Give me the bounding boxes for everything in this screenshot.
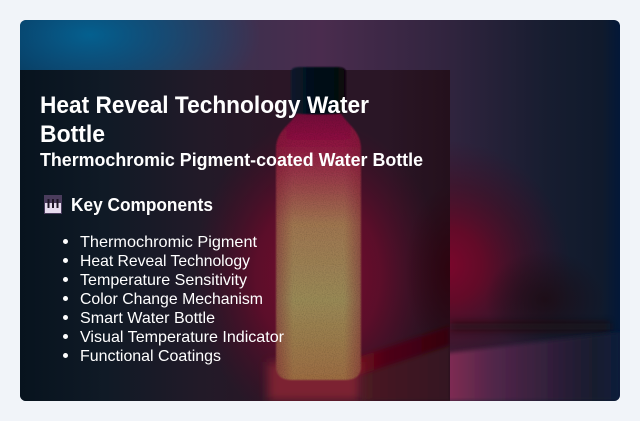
bottle reflection on floor: [268, 362, 360, 401]
title: Heat Reveal Technology Water: [40, 92, 369, 119]
component list: Color Change Mechanism: [80, 291, 263, 308]
bottle body: [276, 112, 361, 380]
text content: [40, 92, 423, 365]
bottle: [268, 67, 361, 401]
component list: Temperature Sensitivity: [80, 272, 247, 289]
component list: Functional Coatings: [80, 348, 221, 365]
component list: Visual Temperature Indicator: [80, 329, 285, 346]
bottle cap: [291, 67, 346, 114]
translucent text panel: [20, 70, 495, 401]
component list: Heat Reveal Technology: [80, 253, 250, 270]
bottle grain texture: [276, 112, 361, 380]
title: [42, 96, 369, 142]
component list: [63, 234, 285, 365]
component list: Thermochromic Pigment: [80, 234, 258, 251]
section heading: key components: Key Components: [71, 195, 213, 215]
component list: Smart Water Bottle: [80, 310, 215, 327]
icon: piano keys: [44, 195, 62, 214]
subtitle: Thermochromic Pigment-coated Water Bottle: [40, 150, 423, 170]
title: Bottle: [40, 121, 105, 148]
